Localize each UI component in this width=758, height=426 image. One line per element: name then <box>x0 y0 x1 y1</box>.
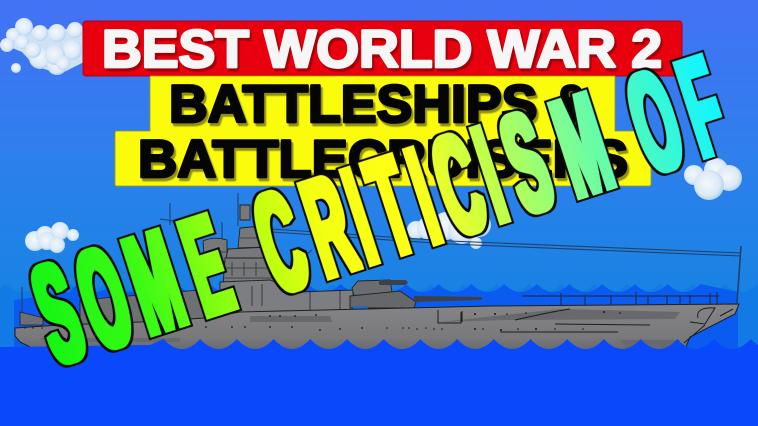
battleship <box>15 193 741 352</box>
midship deckhouse <box>220 280 353 314</box>
subtitle banner: yellow <box>115 75 651 189</box>
cloud: top left <box>0 18 84 75</box>
foreground sea <box>0 339 758 426</box>
rigging cables <box>22 193 741 312</box>
bridge tower <box>222 205 280 300</box>
bridge detail lines <box>206 238 276 278</box>
subtitle line 1: BATTLESHIPS & <box>169 75 591 134</box>
deckhouse detail lines <box>252 284 355 312</box>
cloud: behind cable <box>407 212 491 249</box>
hull lines and portholes <box>438 292 733 343</box>
gun barrels <box>379 280 482 302</box>
title text: BEST WORLD WAR 2 <box>102 20 662 79</box>
cloud: lower left <box>25 222 79 253</box>
turret window <box>353 306 368 310</box>
cloud: right <box>684 158 742 200</box>
hull shading <box>40 309 680 352</box>
title banner: red <box>83 20 682 79</box>
overlay headline: SOME CRITICISM OF <box>18 28 742 394</box>
aft superstructure <box>80 290 225 326</box>
far waves: pale <box>0 284 758 360</box>
subtitle line 2: BATTLECRUISERS <box>138 130 628 189</box>
hull <box>15 304 739 352</box>
funnel <box>203 238 227 272</box>
aft turret <box>20 312 43 325</box>
forward upper turret <box>352 280 392 296</box>
forward turret <box>350 291 416 308</box>
far waves: dark <box>14 284 738 350</box>
